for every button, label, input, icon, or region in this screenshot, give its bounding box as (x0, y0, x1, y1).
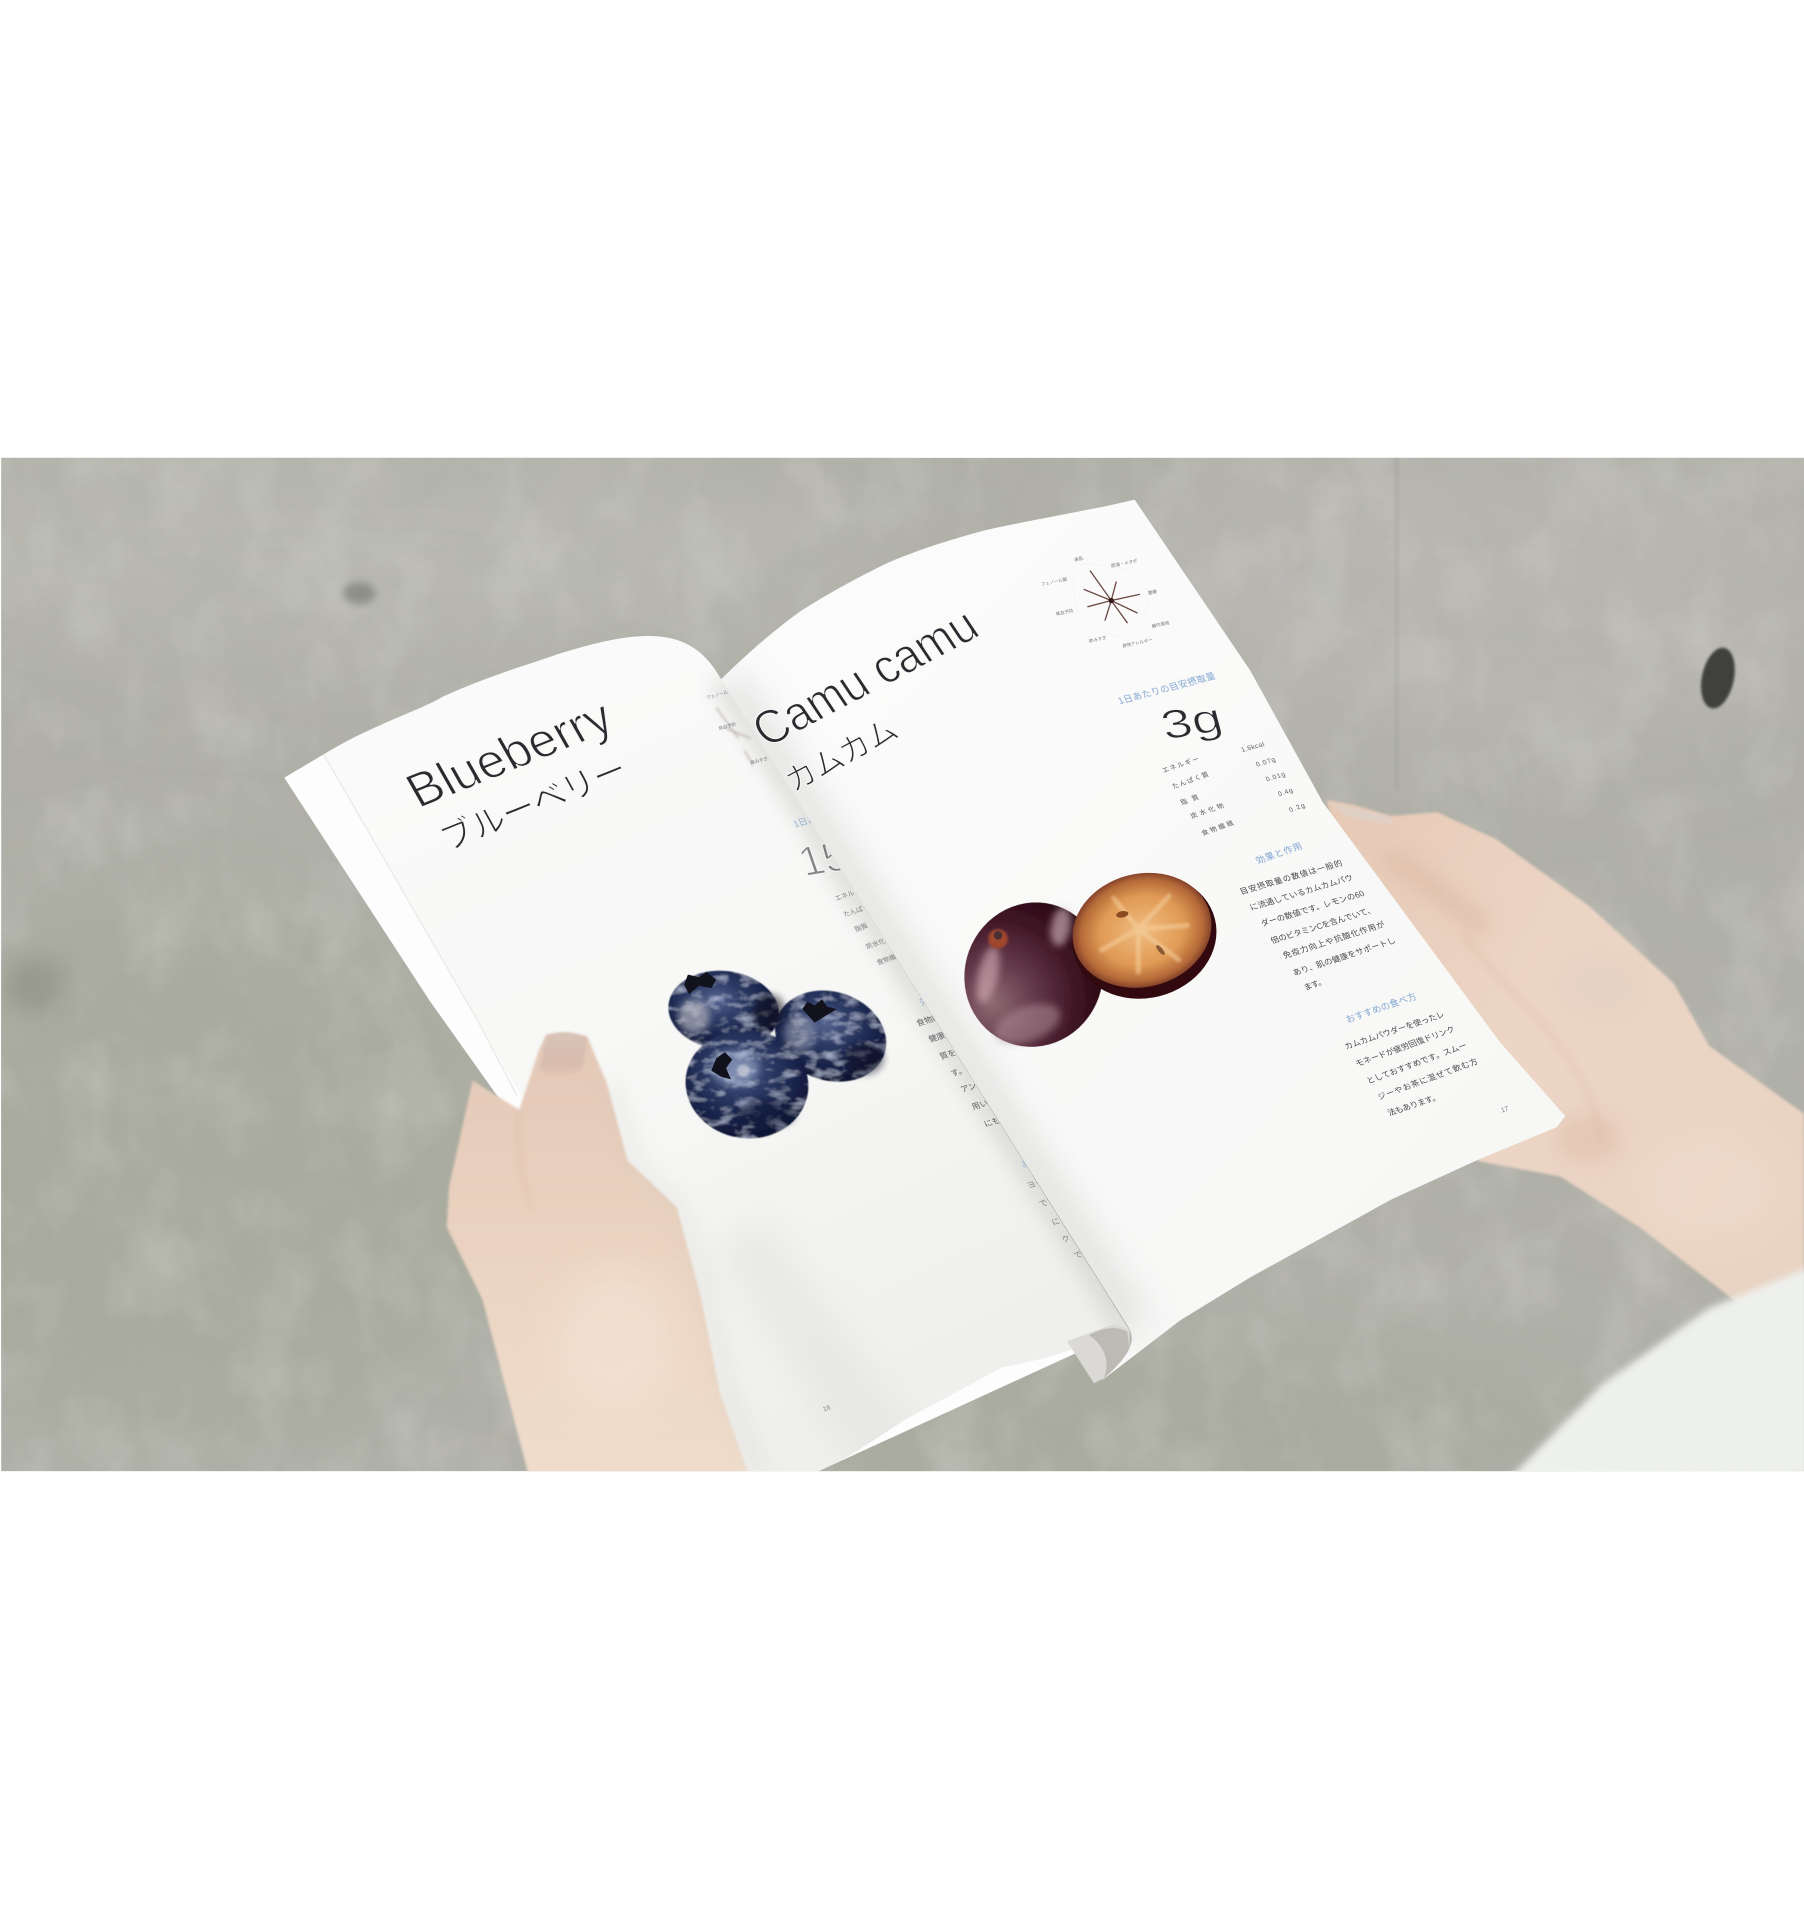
left page recommendation text: です。 (1072, 1245, 1099, 1260)
right hand holding the book (1327, 800, 1804, 1306)
effects body text: 倍のビタミンCを含んでいて、 (1269, 904, 1377, 945)
effects body text: 免疫力向上や抗酸化作用が (1281, 919, 1386, 960)
left page intake heading and value: 15g (792, 829, 877, 885)
right page title: Camu camu (742, 598, 988, 757)
left page nutrition list: 脂質 (853, 921, 870, 933)
left page effects text: アントシアニンを (959, 1067, 1025, 1094)
daily intake value: 3g (1156, 694, 1227, 748)
recommendation body text: カムカムパウダーを使ったレ (1342, 1009, 1446, 1051)
nutrition table: 食物繊維 (1200, 818, 1236, 837)
left page recommendation text (1021, 1160, 1082, 1258)
nutrition table: 脂質 (1179, 792, 1201, 807)
left page of the open book (284, 636, 1128, 1477)
effects heading: 効果と作用 (1253, 840, 1304, 866)
right page number: 17 (1500, 1105, 1510, 1115)
left page nutrition list: たんぱく質 (842, 900, 878, 919)
nutrition table (1161, 741, 1307, 837)
recommendation body text: 法もあります。 (1385, 1092, 1442, 1118)
blueberries photo (668, 970, 888, 1140)
left page recommendation text: おすすめの食べ方 (1019, 1138, 1093, 1170)
left page effects text (916, 998, 1000, 1127)
nutrition table: 0.4g (1277, 787, 1295, 798)
left page nutrition list (835, 890, 896, 965)
nutrition table: 0.01g (1265, 771, 1287, 783)
nutrition table: たんぱく質 (1170, 770, 1211, 791)
effects body text: に流通しているカムカムパウ (1248, 872, 1355, 912)
nutrition table: 1.6kcal (1240, 741, 1266, 754)
radar chart: フェノール酸 (1040, 575, 1068, 588)
radar chart: 貧血予防 (1055, 607, 1074, 617)
nutrition table: エネルギー (1161, 755, 1201, 775)
effects body text: ダーの数値です。レモンの60 (1259, 888, 1366, 928)
recommendation body text: モネードが疲労回復ドリンク (1353, 1024, 1457, 1068)
left page chart fragment (706, 689, 769, 766)
left hand holding the book (447, 1032, 758, 1477)
effects body text (1238, 858, 1397, 992)
radar chart: 整腸 (1147, 588, 1158, 597)
left page effects text: す。目の健康にも (949, 1051, 1015, 1078)
radar chart: 飲みすぎ (1088, 634, 1108, 645)
left page effects text: にも役立ちます。 (982, 1101, 1048, 1129)
recommendation body text (1342, 1009, 1480, 1118)
left page chart fragment: 貧血予防 (718, 720, 737, 732)
camu camu fruit photo (944, 858, 1230, 1066)
left page intake heading and value: 1日あたりの目安摂取量 (791, 794, 889, 829)
radar chart: 美肌 (1074, 555, 1084, 563)
left page effects text: 用いられることが (970, 1084, 1036, 1112)
left page intake heading and value (794, 818, 841, 875)
radar chart: 食物アレルギー (1122, 636, 1153, 649)
recommendation heading: おすすめの食べ方 (1343, 990, 1418, 1025)
effects body text: あり、肌の健康をサポートし (1291, 935, 1397, 977)
recommendation body text: ジーやお茶に混ぜて飲む方 (1375, 1056, 1480, 1102)
left page effects text: 健康的な体づくり (927, 1016, 993, 1044)
left page effects text: 質を改善する働き (938, 1033, 1004, 1061)
radar chart: 肥満・メタボ (1111, 557, 1138, 569)
radar chart (1040, 555, 1170, 649)
left page number: 16 (822, 1404, 832, 1414)
left page nutrition list: 炭水化物 (864, 934, 893, 951)
recommendation body text: としておすすめです。スムー (1365, 1041, 1469, 1086)
right page of the open book (721, 500, 1565, 1381)
radar chart: 腸内環境 (1151, 619, 1170, 630)
shirt sleeve (1507, 1268, 1804, 1480)
effects body text: ます。 (1302, 977, 1328, 992)
nutrition table: 0.07g (1255, 756, 1277, 769)
left page recommendation text: にしても (1050, 1209, 1085, 1227)
left page recommendation text: ヨーグルトに (1025, 1166, 1076, 1190)
left page title: Blueberry (397, 690, 623, 818)
concrete wall background (0, 418, 1804, 1514)
bottom fold of the book pages (1067, 1324, 1130, 1383)
left page katakana title: ブルーベリー (434, 752, 635, 858)
right page katakana title: カムカム (778, 712, 904, 799)
left page nutrition list: エネルギー (833, 885, 869, 903)
daily intake heading: 1日あたりの目安摂取量 (1116, 670, 1217, 706)
left page chart fragment: フェノール (706, 689, 729, 701)
effects body text: 目安摂取量の数値は一般的 (1238, 858, 1344, 896)
left page chart fragment: 飲みすぎ (750, 755, 769, 766)
left page recommendation text: ですが、ジャム (1037, 1182, 1095, 1209)
left page recommendation text: クッキーに (1060, 1224, 1103, 1244)
nutrition table: 0.2g (1288, 802, 1307, 814)
left page effects text: 効果と作用 (918, 984, 966, 1007)
left page nutrition list: 食物繊維 (875, 950, 905, 967)
nutrition table: 炭水化物 (1189, 801, 1226, 820)
left page effects text: 食物繊維が豊富で (914, 1000, 981, 1028)
